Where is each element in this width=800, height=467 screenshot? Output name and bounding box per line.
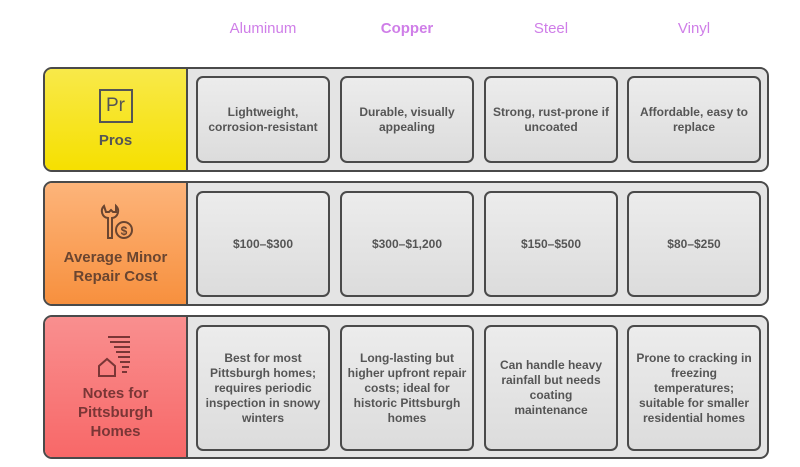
cell: $300–$1,200: [372, 236, 442, 250]
cell: [340, 191, 474, 297]
cell: [196, 76, 330, 163]
cell: [627, 76, 761, 163]
cell: freezing: [671, 366, 717, 380]
cell: [484, 325, 618, 451]
cell: [627, 191, 761, 297]
cell: Prone to cracking in: [636, 350, 752, 364]
cell: Lightweight,: [228, 104, 298, 118]
cell: residential homes: [643, 410, 745, 424]
cell: Affordable, easy to: [640, 104, 748, 118]
icon: Pr: [98, 89, 132, 123]
icon: house with wind: [98, 336, 130, 377]
label: Notes: Pittsburgh: [78, 404, 153, 420]
label: Average Minor Repair Cost: [45, 183, 188, 304]
row: Notes for Pittsburgh Homes: [43, 315, 769, 459]
cell: costs; ideal for: [364, 380, 450, 394]
cell: [196, 325, 330, 451]
cell: winters: [242, 410, 284, 424]
cell: Best for most: [224, 350, 302, 364]
cell: [627, 325, 761, 451]
cell: homes: [388, 410, 426, 424]
cell: inspection in snowy: [206, 396, 320, 410]
cell: [340, 325, 474, 451]
icon: wrench and dollar: $: [120, 224, 127, 238]
cell: Can handle heavy: [500, 358, 602, 372]
cell: uncoated: [524, 120, 578, 134]
cell: $80–$250: [667, 236, 721, 250]
cell: replace: [673, 120, 715, 134]
cell: [484, 76, 618, 163]
cell: requires periodic: [214, 380, 312, 394]
cell: rainfall but needs: [501, 373, 601, 387]
cell: [196, 191, 330, 297]
label: Notes: Homes: [90, 422, 141, 440]
label: Pros: Pros: [99, 132, 132, 149]
row: Average Minor Repair Cost: [43, 181, 769, 306]
cell: appealing: [379, 120, 435, 134]
cell: [340, 76, 474, 163]
cell: $150–$500: [521, 236, 581, 250]
cell: suitable for smaller: [639, 396, 749, 410]
header: Steel: Steel: [534, 20, 568, 37]
cell: corrosion-resistant: [208, 120, 318, 134]
label: Average Minor Repair Cost: Repair Cost: [73, 268, 158, 284]
cell: coating: [530, 388, 572, 402]
label: Notes: Notes for: [83, 384, 148, 402]
header: Aluminum: Aluminum: [230, 20, 296, 37]
cell: higher upfront repair: [348, 366, 466, 380]
icon: wrench and dollar: [100, 204, 133, 239]
cell: $100–$300: [233, 236, 293, 250]
label: Notes: [45, 317, 188, 457]
header: Copper: Copper: [381, 20, 433, 37]
header: Vinyl: Vinyl: [678, 20, 710, 37]
cell: [484, 191, 618, 297]
label: Average Minor Repair Cost: Average Minor: [64, 248, 167, 266]
cell: historic Pittsburgh: [354, 396, 460, 410]
label: Pros: [45, 69, 188, 170]
cell: temperatures;: [654, 380, 734, 394]
row: Pros: [43, 67, 769, 172]
cell: Strong, rust-prone if: [493, 104, 609, 118]
icon: Pr: Pr: [106, 95, 125, 116]
cell: Long-lasting but: [360, 350, 454, 364]
cell: Pittsburgh homes;: [210, 366, 316, 380]
cell: Durable, visually: [359, 104, 455, 118]
cell: maintenance: [514, 403, 588, 417]
